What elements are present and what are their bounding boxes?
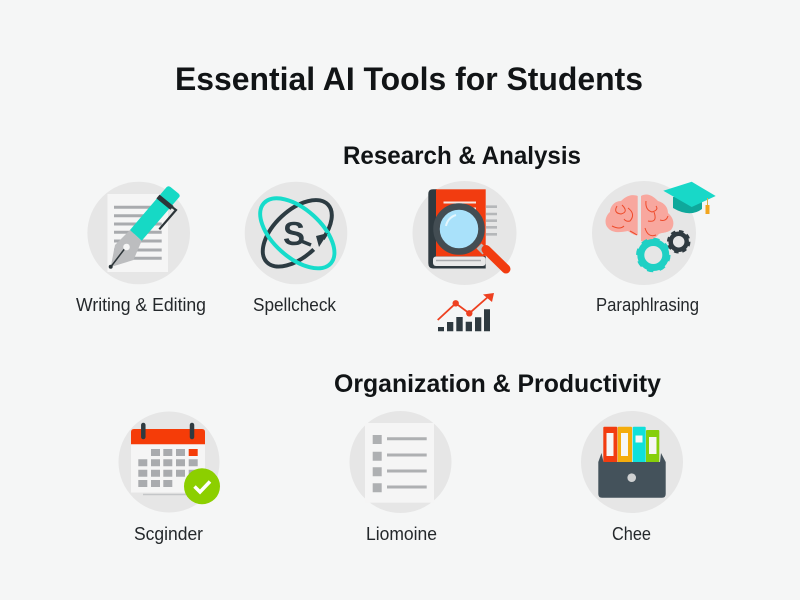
chart: rising bars and trend arrow bbox=[438, 293, 494, 331]
label: Paraphlrasing bbox=[596, 295, 699, 315]
label: Liomoine bbox=[366, 524, 437, 544]
tool: Writing & Editing bbox=[76, 182, 206, 315]
icon: checklist page bbox=[365, 423, 434, 503]
icon: colored binders bbox=[603, 427, 659, 463]
icon: magnifier bbox=[436, 206, 506, 269]
tool: Checklist bbox=[350, 411, 452, 544]
tool: Spellcheck bbox=[245, 182, 347, 315]
icon: graduation cap bbox=[663, 182, 716, 214]
tool: Scheduler calendar bbox=[118, 412, 220, 544]
icon: calendar bbox=[131, 425, 205, 494]
tool: Paraphrasing bbox=[592, 181, 716, 315]
icon: green check badge bbox=[184, 468, 220, 504]
icon: fountain pen bbox=[109, 186, 180, 269]
icon: brain bbox=[606, 195, 673, 242]
heading: Research & Analysis: Research & Analysis bbox=[343, 142, 581, 170]
icon: storage box bbox=[598, 453, 666, 498]
icon: orbit S: S bbox=[283, 215, 305, 252]
tool: Binder box bbox=[581, 411, 683, 544]
title: Essential AI Tools for Students bbox=[175, 61, 643, 97]
label: Chee bbox=[612, 524, 651, 544]
icon: gears bbox=[638, 231, 689, 270]
tool: Research book and magnifier bbox=[412, 181, 516, 331]
document page bbox=[108, 194, 168, 272]
label: Spellcheck bbox=[253, 295, 337, 315]
heading: Organization & Productivity: Organization & Productivity bbox=[334, 370, 661, 398]
icon: book bbox=[428, 189, 497, 268]
label: Scginder bbox=[134, 524, 203, 544]
label: Writing & Editing bbox=[76, 295, 206, 315]
